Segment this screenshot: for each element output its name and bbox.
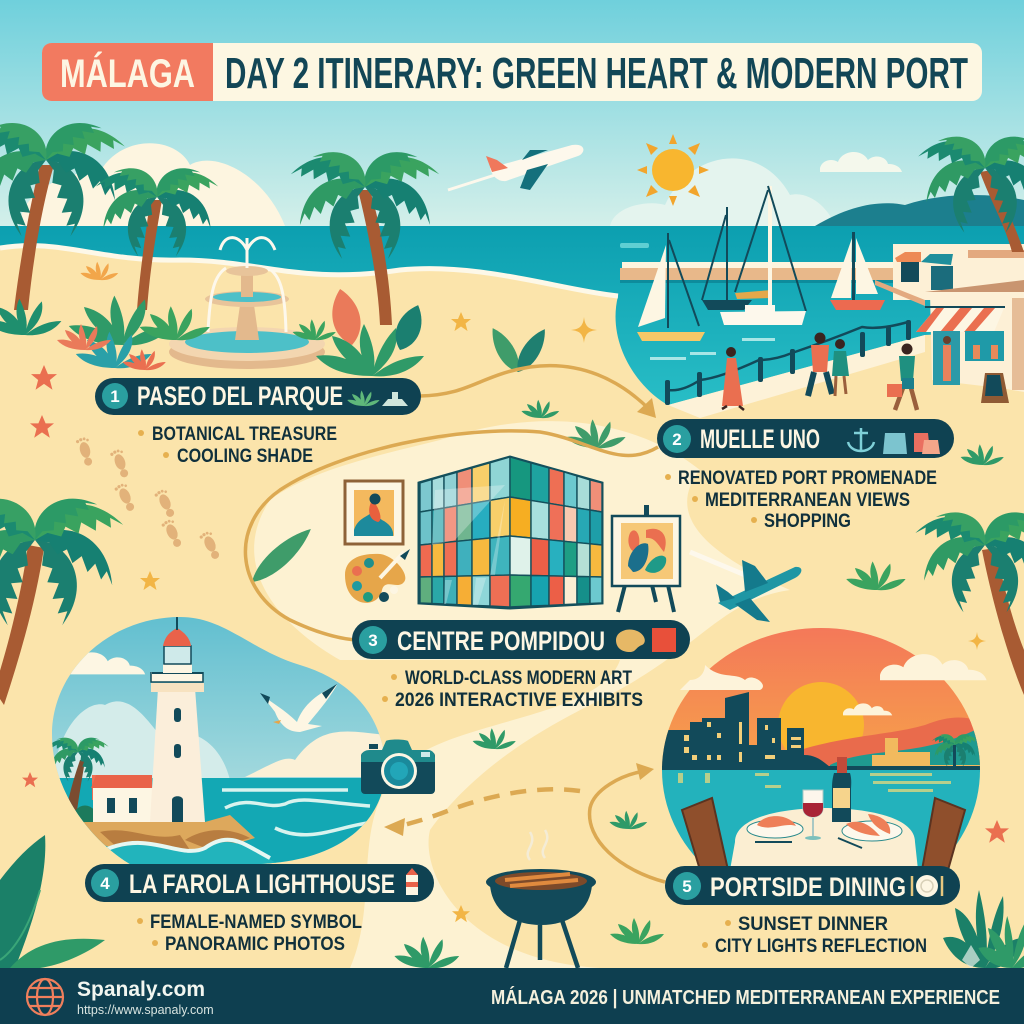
- stop 3 text: [382, 668, 643, 711]
- stop 4 text: [137, 912, 362, 955]
- palm tree top right: [917, 123, 1024, 252]
- route: muelle to pompidou: [245, 431, 658, 640]
- route: lighthouse to dining curved arrow: [590, 763, 665, 882]
- people walking: [722, 332, 917, 410]
- icon: chalkboard: [981, 373, 1009, 403]
- breakwater pier: [620, 262, 900, 283]
- marina: sailboats: [620, 186, 885, 360]
- stop 2 text: MEDITERRANEAN VIEWS: [705, 490, 910, 511]
- stop 1 text: COOLING SHADE: [177, 446, 313, 467]
- stop 5 label: Portside Dining: 5: [682, 877, 692, 896]
- vignette: lighthouse scene: [47, 614, 386, 870]
- footer bar: https://www.spanaly.com: [77, 1003, 214, 1017]
- title bar: MÁLAGA: [60, 51, 195, 96]
- dining: chairs: [682, 798, 965, 870]
- icon: teal airplane: [690, 552, 801, 622]
- icon: barbecue grill: [486, 830, 596, 968]
- stop 1 text: [138, 424, 337, 467]
- marina: port building: [875, 244, 1024, 306]
- fountain: [169, 238, 325, 369]
- stop 4 text: FEMALE-NAMED SYMBOL: [150, 912, 362, 933]
- sunset clouds: [680, 654, 987, 715]
- vignette: sunset dining scene: [660, 620, 985, 870]
- stop 1 label: Paseo del Parque: [95, 378, 421, 415]
- icon: paint palette: [345, 549, 410, 603]
- stop 3 text: 2026 INTERACTIVE EXHIBITS: [395, 690, 643, 711]
- stop 4 text: PANORAMIC PHOTOS: [165, 934, 345, 955]
- decorative leaves and stars on the beach: [22, 312, 1009, 968]
- stop 5 text: [702, 914, 927, 957]
- icon: airplane: [448, 145, 583, 190]
- icon: globe logo: [27, 979, 63, 1015]
- icon: sun: [637, 134, 709, 206]
- stop 5 text: CITY LIGHTS REFLECTION: [715, 936, 927, 957]
- stop 5 text: SUNSET DINNER: [738, 914, 888, 935]
- stop 5 label: Portside Dining: [665, 866, 960, 905]
- footprints: [75, 436, 222, 561]
- palm tree second: [95, 156, 219, 310]
- dining: table and food: [730, 757, 918, 870]
- stop 5 label: Portside Dining: PORTSIDE DINING: [710, 872, 906, 902]
- cream path areas: [254, 421, 790, 968]
- palm tree centre: [290, 138, 440, 325]
- footer bar: [0, 945, 1024, 1024]
- stop 2 text: [665, 468, 937, 532]
- stop 2 text: SHOPPING: [764, 511, 851, 532]
- stop 2 label: Muelle Uno: 2: [672, 430, 682, 449]
- stop 3 label: Centre Pompidou: [352, 620, 690, 659]
- stop 1 label: Paseo del Parque: 1: [110, 387, 120, 406]
- palm tree top left: [0, 107, 126, 310]
- stop 2 label: Muelle Uno: [657, 419, 954, 458]
- stop 2 text: RENOVATED PORT PROMENADE: [678, 468, 937, 489]
- marina: shop: [916, 280, 1024, 392]
- footer bar: Spanaly.com: [77, 978, 205, 1001]
- stop 3 label: Centre Pompidou: CENTRE POMPIDOU: [397, 626, 605, 656]
- marina: rope fence: [665, 320, 911, 405]
- scene: sky and clouds: [0, 0, 1024, 232]
- icon: camera: [361, 740, 435, 794]
- icon: easel with abstract painting: [612, 505, 680, 612]
- stop 2 label: Muelle Uno: MUELLE UNO: [700, 424, 820, 454]
- stop 3 label: Centre Pompidou: 3: [368, 631, 378, 650]
- tropical leaves bottom right: [943, 890, 1024, 969]
- palm tree right middle: [914, 499, 1024, 695]
- palm tree left middle: [0, 481, 124, 705]
- Centre Pompidou glass cube: [419, 457, 602, 608]
- stop 1 label: Paseo del Parque: PASEO DEL PARQUE: [137, 381, 343, 411]
- icon: framed portrait: [345, 481, 403, 544]
- scene: beach sand: [0, 246, 1024, 1024]
- title bar: [42, 43, 982, 101]
- garden plants right: [293, 286, 429, 376]
- stop 3 text: WORLD-CLASS MODERN ART: [405, 668, 632, 689]
- scene: sea: [0, 226, 1024, 420]
- icon: seagull: [260, 684, 337, 732]
- route: dashed to lighthouse: [384, 789, 580, 836]
- stop 4 label: La Farola Lighthouse: LA FAROLA LIGHTHOUSE: [129, 869, 395, 899]
- stop 4 label: La Farola Lighthouse: 4: [100, 874, 110, 893]
- stop 4 label: La Farola Lighthouse: [85, 864, 434, 902]
- tropical leaves bottom left: [0, 835, 105, 968]
- route: paseo to muelle: [420, 366, 656, 418]
- stop 1 text: BOTANICAL TREASURE: [152, 424, 337, 445]
- garden plants left: [0, 262, 210, 370]
